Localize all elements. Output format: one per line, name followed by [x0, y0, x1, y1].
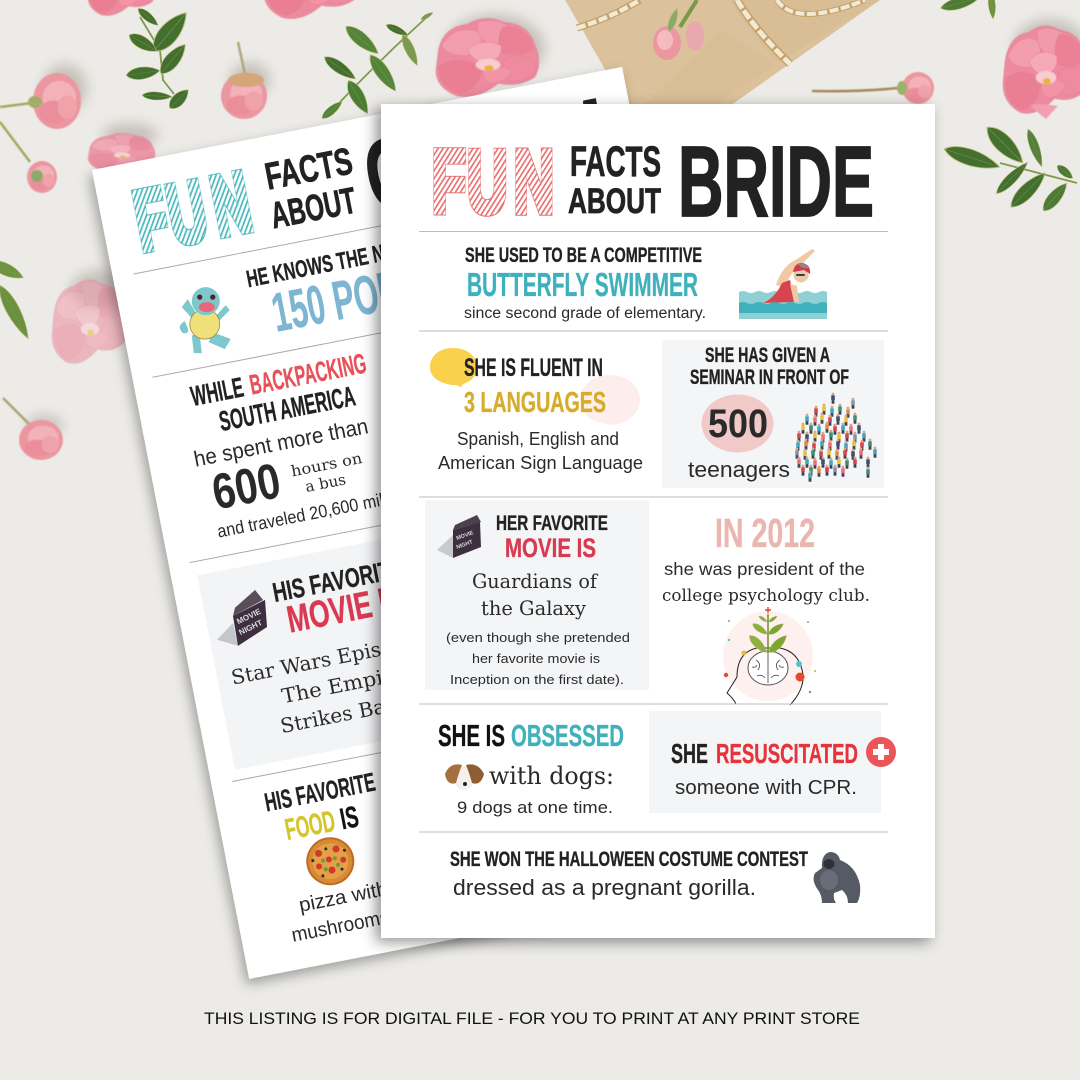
fact: obsessed with dogs: OBSESSED — [511, 718, 624, 753]
fact: halloween costume contest — [450, 848, 808, 900]
front card: fun facts about bride — [381, 104, 935, 938]
icon: brain with growing plant — [723, 607, 816, 705]
fact: favorite food pizza: FOOD — [282, 805, 338, 847]
panel: his favorite movie: Star Wars Episode V: — [229, 625, 445, 690]
panel: seminar in front of 500 teenagers: SHE HAS GIVEN A — [705, 344, 830, 367]
panel: seminar in front of 500 teenagers — [662, 340, 884, 488]
icon: clapperboard: MOVIE — [235, 607, 263, 626]
fact: halloween costume contest: dressed as a pregnant gorilla. — [453, 875, 756, 900]
panel: seminar in front of 500 teenagers: teenagers — [688, 457, 790, 482]
icon: movie night clapperboard — [437, 515, 481, 558]
panel: her favorite movie: MOVIE IS — [505, 533, 596, 563]
panel: her favorite movie — [425, 500, 649, 690]
kraft gift box with twine — [565, 0, 880, 108]
icon: movie night clapperboard: MOVIE — [456, 530, 475, 542]
fact: president of college psychology club: IN 2012 — [715, 510, 815, 556]
front card sheet — [381, 104, 935, 938]
back card: fun facts about groom — [92, 67, 779, 979]
fact: backpacking south america: he spent more than — [192, 413, 370, 472]
fact: backpacking south america — [179, 346, 402, 543]
panel: resuscitated someone with CPR: RESUSCITATED — [716, 738, 858, 769]
fact: backpacking south america: hours on — [289, 449, 364, 480]
fact: backpacking south america: BACKPACKING — [247, 348, 369, 401]
languages text: SHE IS FLUENT IN — [464, 354, 603, 382]
icon: turtle character — [180, 287, 231, 353]
fact: backpacking south america: a bus — [304, 470, 347, 496]
fact: obsessed with dogs — [438, 718, 624, 817]
icon: clapperboard: NIGHT — [237, 618, 264, 637]
panel: her favorite movie: HER FAVORITE — [496, 512, 608, 535]
number badge 500 — [702, 394, 774, 452]
panel: resuscitated someone with CPR: SHE — [671, 738, 708, 769]
fact: backpacking south america: and traveled 20,600 miles — [215, 486, 402, 542]
panel: her favorite movie: the Galaxy — [481, 596, 587, 620]
fact: backpacking south america: WHILE — [188, 371, 246, 412]
panel: seminar in front of 500 teenagers: 500 — [708, 402, 768, 446]
panel: his favorite movie: The Empire — [280, 661, 407, 708]
fact: favorite food pizza: HIS FAVORITE — [262, 767, 378, 817]
panel: his favorite movie: MOVIE IS — [284, 578, 407, 642]
fact: obsessed with dogs: 9 dogs at one time. — [457, 799, 613, 817]
back card title word FUN: FUN — [127, 154, 258, 269]
fact: halloween costume contest: SHE WON THE HALLOWEEN COSTUME CONTEST — [450, 848, 808, 871]
fact: favorite food pizza: mushrooms and olives — [290, 889, 480, 947]
icon: pink speech bubble — [580, 375, 640, 425]
title FACTS ABOUT — [568, 138, 661, 221]
fact: president of college psychology club — [662, 510, 870, 606]
icon: dog face — [445, 764, 484, 790]
icon: crowd of people — [795, 393, 877, 482]
icon: gorilla — [814, 852, 860, 903]
panel: his favorite movie: Strikes Back — [278, 689, 411, 738]
panel: her favorite movie: Guardians of — [472, 569, 599, 593]
fact: president of college psychology club: college psychology club. — [662, 586, 870, 606]
fact: favorite food pizza: pizza with — [297, 878, 390, 917]
panel: his favorite movie — [197, 526, 490, 770]
fact: butterfly swimmer — [464, 244, 706, 322]
back card sheet — [92, 67, 779, 979]
footer note: THIS LISTING IS FOR DIGITAL FILE - FOR YOU TO PRINT AT ANY PRINT STORE — [204, 1010, 860, 1028]
icon: clapperboard — [209, 589, 273, 650]
title BRIDE: BRIDE — [678, 126, 874, 238]
panel: her favorite movie: Inception on the first date). — [450, 672, 624, 687]
fact: favorite food pizza — [262, 751, 480, 947]
panel: resuscitated someone with CPR: someone with CPR. — [675, 777, 857, 799]
panel: his favorite movie: HIS FAVORITE — [270, 553, 406, 608]
green leaf sprigs — [0, 0, 1077, 342]
flowers scattered on the surface — [0, 0, 1080, 460]
fact: obsessed with dogs: with dogs: — [489, 762, 614, 790]
title FACTS ABOUT: FACTS — [570, 138, 661, 186]
fact: president of college psychology club: she was president of the — [664, 559, 865, 579]
panel: seminar in front of 500 teenagers: SEMINAR IN FRONT OF — [690, 366, 849, 389]
icon: swimmer in water — [739, 249, 827, 319]
back card title FACTS ABOUT: ABOUT — [267, 180, 360, 236]
languages text — [438, 354, 643, 473]
title FACTS ABOUT: ABOUT — [568, 182, 661, 221]
fact: fluent in 3 languages — [430, 348, 643, 473]
panel: her favorite movie: her favorite movie is — [472, 651, 601, 666]
back card title FACTS ABOUT: FACTS — [262, 141, 356, 199]
fact: butterfly swimmer: BUTTERFLY SWIMMER — [467, 266, 698, 303]
fact: backpacking south america: 600 — [207, 452, 285, 520]
back card title GROOM: GROOM — [356, 77, 616, 231]
icon: medical cross — [866, 737, 896, 767]
panel: her favorite movie: (even though she pretended — [446, 630, 630, 645]
fact: favorite food pizza: IS — [337, 800, 361, 836]
fact: knows the names of 150 pokemon: 150 POKEMON — [267, 240, 499, 344]
title word FUN: FUN — [432, 132, 554, 231]
languages text: Spanish, English and — [457, 429, 619, 449]
soft shadows under flowers — [27, 14, 1080, 435]
languages text: 3 LANGUAGES — [464, 387, 606, 419]
back card title FACTS ABOUT — [260, 141, 363, 236]
fact: butterfly swimmer: since second grade of elementary. — [464, 305, 706, 322]
fact: knows the names of 150 pokemon — [244, 220, 499, 347]
fact: obsessed with dogs: SHE IS — [438, 718, 505, 753]
languages text: American Sign Language — [438, 453, 643, 473]
icon: pizza — [303, 834, 357, 888]
fact: knows the names of 150 pokemon: HE KNOWS THE NAMES OF — [244, 226, 458, 293]
fact: butterfly swimmer: SHE USED TO BE A COMPETITIVE — [465, 244, 702, 267]
fact: backpacking south america: SOUTH AMERICA — [216, 380, 358, 437]
icon: movie night clapperboard: NIGHT — [456, 539, 474, 551]
panel: resuscitated someone with CPR — [649, 711, 896, 813]
icon: yellow speech bubble — [430, 348, 477, 387]
